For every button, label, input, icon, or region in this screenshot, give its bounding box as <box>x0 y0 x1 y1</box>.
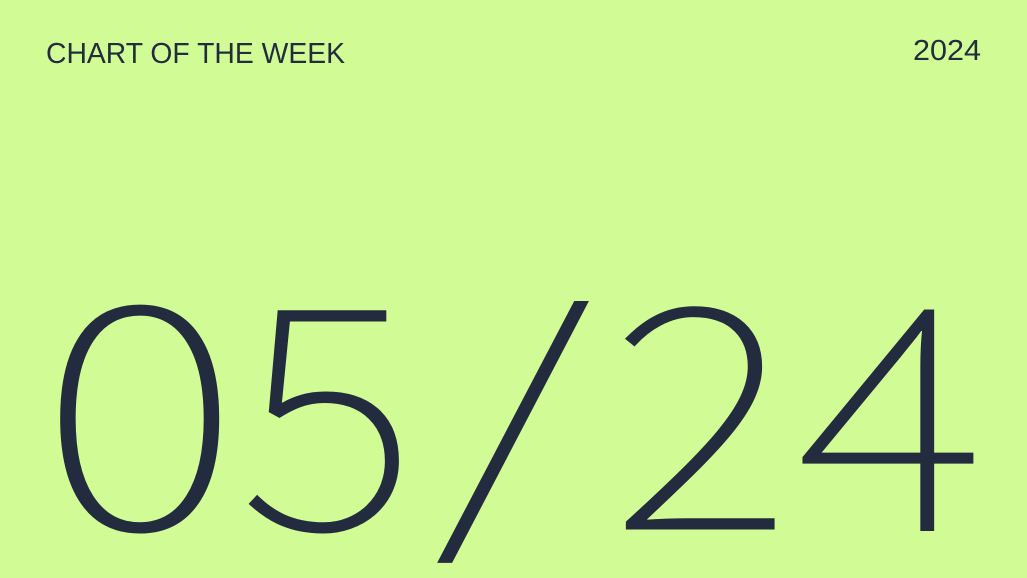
heading: chart of the week: CHART OF THE WEEK <box>46 38 346 70</box>
large date numerals 05/24 <box>40 167 985 578</box>
year label: 2024 <box>913 35 981 67</box>
